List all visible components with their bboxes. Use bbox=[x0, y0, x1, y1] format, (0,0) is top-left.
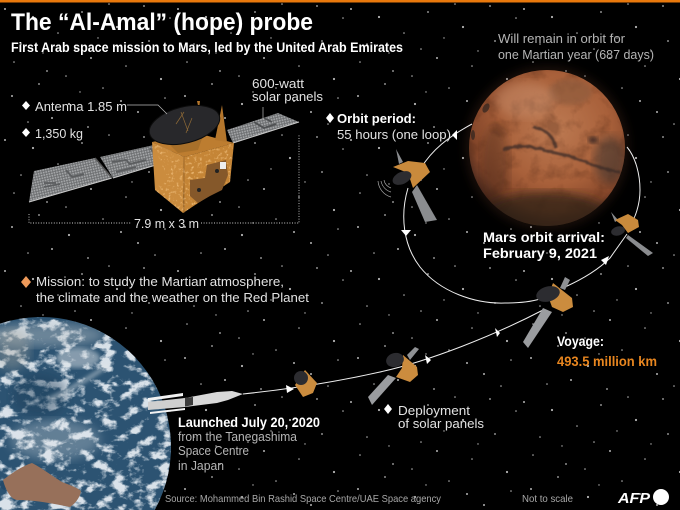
left solar panels bbox=[29, 143, 179, 202]
solar panel label: 600-watt bbox=[252, 76, 304, 91]
probe body bbox=[150, 133, 236, 215]
deployment label bbox=[384, 403, 484, 431]
orbit duration note: one Martian year (687 days) bbox=[498, 47, 654, 62]
scale note: Not to scale bbox=[522, 493, 573, 505]
bullet: mass: 1,350 kg bbox=[35, 126, 83, 141]
launch label: Launched July 20, 2020 bbox=[178, 415, 320, 430]
orbit duration note: Will remain in orbit for bbox=[498, 31, 626, 46]
satellite: orbit period bbox=[378, 149, 437, 222]
deployment label: of solar panels bbox=[398, 416, 484, 431]
Australia bbox=[3, 463, 81, 507]
rocket bbox=[148, 391, 243, 414]
orbit period label bbox=[326, 111, 451, 142]
subtitle: First Arab space mission to Mars, led by the United Arab Emirates bbox=[11, 40, 403, 55]
AFP logo: AFP bbox=[617, 491, 650, 507]
voyage label: Voyage: bbox=[557, 334, 604, 349]
launch label: from the Tanegashima bbox=[178, 429, 298, 444]
deployment label: Deployment bbox=[398, 403, 470, 418]
title: The “Al-Amal” (hope) probe bbox=[11, 9, 313, 36]
launch label: in Japan bbox=[178, 458, 224, 473]
orbit period label: 55 hours (one loop) bbox=[337, 127, 451, 142]
arrival label: Mars orbit arrival: bbox=[483, 229, 605, 245]
arrival label: February 9, 2021 bbox=[483, 245, 597, 261]
orbit period label: Orbit period: bbox=[337, 111, 416, 126]
satellite: after launch bbox=[294, 370, 317, 397]
right solar panel bbox=[227, 113, 299, 143]
solar panel label: solar panels bbox=[252, 89, 323, 104]
arrival label bbox=[483, 229, 605, 261]
main satellite illustration bbox=[29, 99, 299, 223]
satellite: mid cruise bbox=[523, 277, 573, 348]
dimension bracket bbox=[29, 134, 299, 223]
launch label bbox=[178, 415, 320, 473]
dimension label: 7.9 m x 3 m bbox=[134, 216, 199, 231]
launch label: Space Centre bbox=[178, 443, 249, 458]
mission note: the climate and the weather on the Red Planet bbox=[36, 290, 309, 305]
Earth bbox=[0, 317, 172, 510]
voyage trajectory bbox=[243, 234, 627, 394]
AFP logo bbox=[617, 489, 669, 507]
mission note bbox=[21, 274, 309, 305]
orbit arrows bbox=[401, 130, 457, 236]
satellite: arrival bbox=[610, 212, 653, 256]
Mars bbox=[465, 66, 629, 232]
signal waves bbox=[378, 180, 391, 197]
voyage label bbox=[557, 334, 657, 369]
mission note: Mission: to study the Martian atmosphere, bbox=[36, 274, 284, 289]
orbit path bbox=[404, 124, 640, 303]
orbit duration note bbox=[498, 31, 654, 62]
antenna leader line bbox=[127, 105, 167, 114]
satellite: panel deployment bbox=[368, 347, 419, 405]
bullet: antenna: Antenna 1.85 m bbox=[35, 99, 127, 114]
solar panel leader line bbox=[262, 107, 264, 120]
voyage label: 493.5 million km bbox=[557, 354, 657, 369]
dish mast bbox=[215, 105, 227, 142]
antenna dish bbox=[145, 99, 224, 153]
source: Source: Mohammed Bin Rashid Space Centre/UAE Space agency bbox=[165, 493, 442, 505]
solar panel label bbox=[252, 76, 323, 104]
